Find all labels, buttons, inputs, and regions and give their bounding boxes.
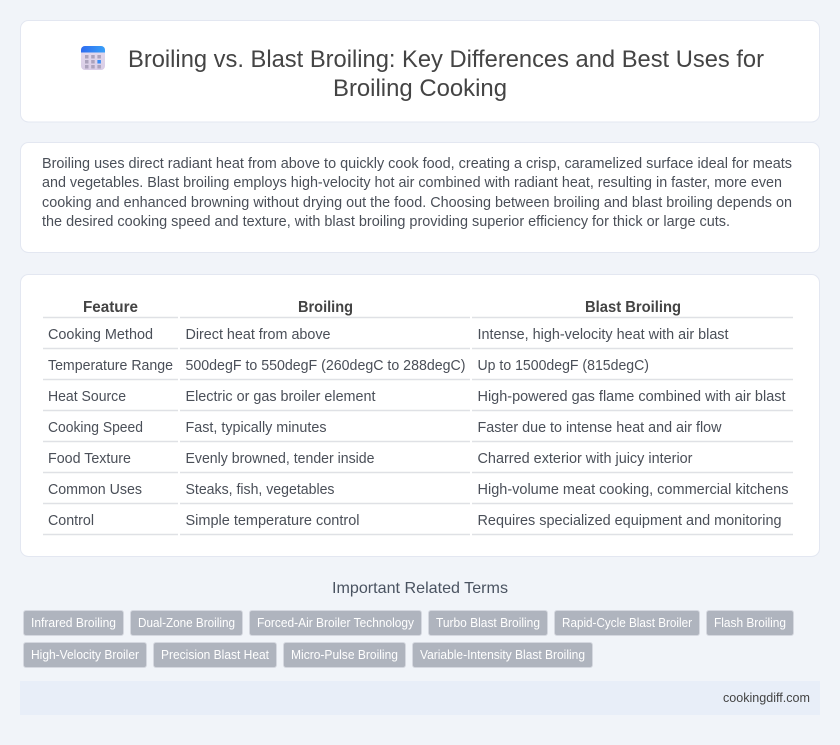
row: cooking speed	[48, 420, 722, 436]
tag	[554, 610, 700, 636]
text block: introduction: and vegetables. Blast broiling employs high-velocity hot air combined with radiant heat, resulting in faster, more even	[42, 175, 782, 191]
table header	[83, 299, 681, 316]
text block: introduction	[42, 156, 792, 230]
tag	[154, 642, 276, 668]
row: cooking speed: Cooking Speed	[48, 420, 143, 436]
row: common uses: Common Uses	[48, 482, 142, 498]
row: heat source: High-powered gas flame combined with air blast	[478, 389, 786, 405]
tag	[24, 610, 124, 636]
row: food texture: Food Texture	[48, 451, 131, 467]
tag: Precision Blast Heat	[161, 648, 269, 662]
table header: Feature	[83, 299, 138, 316]
tag	[706, 610, 794, 636]
panel: introduction	[20, 142, 820, 252]
tag	[412, 642, 592, 668]
table header: Broiling	[298, 299, 353, 316]
row: control	[48, 513, 782, 529]
footer	[20, 681, 820, 715]
tag	[284, 642, 406, 668]
row: temperature range	[48, 358, 649, 374]
row: cooking method: Direct heat from above	[186, 327, 330, 343]
tag: Variable-Intensity Blast Broiling	[420, 648, 585, 662]
tag: Micro-Pulse Broiling	[291, 648, 398, 662]
table header: Blast Broiling	[585, 299, 681, 316]
title: Broiling vs. Blast Broiling: Key Differences and Best Uses for	[128, 46, 764, 73]
text block: introduction: the desired cooking speed and texture, with blast broiling providing superior efficiency for thick or large cuts.	[42, 214, 730, 230]
row: food texture: Charred exterior with juicy interior	[478, 451, 693, 467]
row: temperature range: 500degF to 550degF (260degC to 288degC)	[186, 358, 466, 374]
row: cooking speed: Faster due to intense heat and air flow	[478, 420, 722, 436]
icon: calendar	[81, 46, 105, 70]
tag: Forced-Air Broiler Technology	[257, 616, 415, 630]
text block: introduction: Broiling uses direct radiant heat from above to quickly cook food, creating a crisp, caramelized surface ideal for meats	[42, 156, 792, 172]
row: heat source	[48, 389, 786, 405]
panel: comparison table	[20, 274, 820, 556]
tag: Turbo Blast Broiling	[436, 616, 540, 630]
row: temperature range: Temperature Range	[48, 358, 173, 374]
text block: introduction: cooking and enhanced browning without drying out the food. Choosing between broiling and blast broiling depends on	[42, 195, 792, 211]
panel: header	[20, 20, 820, 122]
row: cooking method: Intense, high-velocity heat with air blast	[478, 327, 728, 343]
row: temperature range: Up to 1500degF (815degC)	[478, 358, 649, 374]
row: control: Requires specialized equipment and monitoring	[478, 513, 782, 529]
tag	[250, 610, 422, 636]
row: common uses: High-volume meat cooking, commercial kitchens	[478, 482, 788, 498]
title	[128, 46, 764, 102]
footer: cookingdiff.com	[723, 691, 810, 705]
row: food texture: Evenly browned, tender inside	[186, 451, 374, 467]
row: heat source: Electric or gas broiler element	[186, 389, 376, 405]
tag	[130, 610, 242, 636]
tag	[24, 642, 146, 668]
row: food texture	[48, 451, 693, 467]
tag: Flash Broiling	[714, 616, 786, 630]
tag: High-Velocity Broiler	[31, 648, 139, 662]
title: Broiling Cooking	[333, 75, 507, 102]
row: cooking speed: Fast, typically minutes	[186, 420, 326, 436]
tag	[428, 610, 548, 636]
row: control: Control	[48, 513, 94, 529]
tag: Dual-Zone Broiling	[138, 616, 235, 630]
tag: Infrared Broiling	[31, 616, 116, 630]
row: common uses	[48, 482, 788, 498]
row: common uses: Steaks, fish, vegetables	[186, 482, 334, 498]
row: control: Simple temperature control	[186, 513, 360, 529]
row: heat source: Heat Source	[48, 389, 126, 405]
row: cooking method: Cooking Method	[48, 327, 153, 343]
heading: related terms: Important Related Terms	[332, 580, 508, 597]
row: cooking method	[48, 327, 728, 343]
tag: Rapid-Cycle Blast Broiler	[562, 616, 692, 630]
tags: related terms	[24, 610, 794, 668]
